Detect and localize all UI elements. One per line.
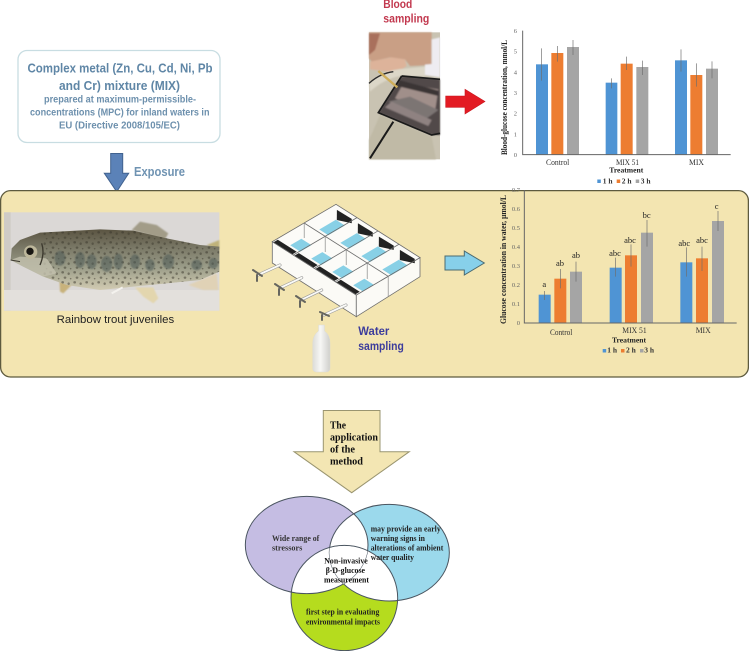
arrow text [330, 420, 378, 468]
y axis tick labels: 4 [514, 69, 518, 76]
legend: 1 h [607, 346, 618, 355]
text: non-invasive measurement [324, 555, 369, 584]
x axis labels [550, 326, 711, 337]
y axis tick labels: 0.6 [512, 206, 521, 213]
arrow: red arrow to blood chart [446, 89, 485, 114]
x axis labels: MIX [689, 158, 704, 167]
text: non-invasive measurement: Non-invasive [324, 555, 368, 565]
significance letters: abc [624, 235, 636, 245]
x axis labels: MIX 51 [616, 158, 639, 167]
y axis tick labels [512, 187, 521, 327]
text: MPC description: EU (Directive 2008/105/EC) [59, 120, 180, 131]
heading: complex metal mixture: Complex metal (Zn, Cu, Cd, Ni, Pb [28, 62, 213, 76]
panel: experimental setting [1, 191, 748, 377]
significance letters: abc [609, 248, 621, 258]
x axis labels: Control [546, 158, 570, 167]
arrow text: of the [330, 445, 355, 456]
text: wide range of stressors [272, 533, 320, 553]
photo: blood sampling from fish [369, 32, 440, 159]
significance letters: bc [643, 210, 651, 220]
arrow: blue arrow to water chart [445, 251, 484, 275]
text: wide range of stressors: Wide range of [272, 533, 320, 543]
venn diagram [245, 496, 449, 651]
y axis tick labels: 3 [514, 90, 517, 97]
y axis tick labels: 0.2 [512, 282, 520, 289]
legend: 1 h [603, 176, 613, 185]
text: MPC description: prepared at maximum-permissible- [44, 95, 196, 106]
significance letters: ab [556, 258, 564, 268]
arrow text: method [330, 457, 363, 468]
y axis title: Glucose concentration in water, µmol/L [499, 195, 508, 324]
arrow text: The [330, 420, 346, 431]
label: water sampling [358, 326, 404, 353]
venn circles [245, 496, 449, 651]
bottle [313, 325, 330, 372]
y axis tick labels: 5 [514, 49, 517, 56]
text: early warning signs: warning signs in [371, 533, 425, 543]
label: exposure: Exposure [134, 165, 185, 179]
label: water sampling: sampling [358, 341, 404, 353]
text: wide range of stressors: stressors [272, 543, 303, 553]
text: early warning signs: water quality [371, 552, 415, 562]
arrow: the application of the method [294, 410, 409, 493]
significance letters: abc [696, 235, 708, 245]
y axis tick labels: 0 [517, 320, 520, 327]
y axis tick labels: 0.3 [512, 263, 520, 270]
heading: complex metal mixture [28, 62, 213, 93]
y axis tick labels: 0.7 [512, 187, 521, 194]
significance letters: ab [572, 250, 580, 260]
bars and error bars [523, 31, 731, 155]
y axis tick labels: 0.5 [512, 225, 520, 232]
text: early warning signs [371, 524, 443, 562]
x axis labels [546, 158, 704, 167]
faucets [253, 265, 346, 320]
text: first step: first step in evaluating [306, 607, 380, 617]
x axis title: Treatment [612, 335, 647, 344]
bars and error bars [524, 190, 737, 323]
text: first step: environmental impacts [306, 616, 381, 626]
x axis labels: MIX 51 [622, 326, 647, 335]
y axis tick labels: 0.1 [512, 301, 520, 308]
text: first step [306, 607, 381, 626]
legend: 3 h [641, 176, 651, 185]
tank top and water [272, 204, 422, 296]
panel: metal mixture text box [18, 50, 220, 142]
text: non-invasive measurement: β-D-glucose [326, 565, 365, 575]
text: non-invasive measurement: measurement [324, 574, 369, 584]
x axis labels: Control [550, 328, 573, 337]
heading: complex metal mixture: and Cr) mixture (MIX) [59, 79, 180, 93]
illustration: tank system with faucets [253, 204, 422, 372]
significance letters: a [542, 279, 546, 289]
y axis tick labels: 0 [514, 152, 517, 159]
y axis tick labels: 6 [514, 28, 518, 35]
significance letters: abc [678, 238, 690, 248]
chart: glucose concentration in water [499, 187, 737, 355]
text: MPC description: concentrations (MPC) for inland waters in [30, 108, 210, 119]
y axis title: Blood-glucose concentration, mmol/L [500, 40, 509, 155]
label: rainbow trout juveniles: Rainbow trout juveniles [57, 314, 175, 326]
text: MPC description [30, 95, 210, 131]
significance letters [542, 201, 719, 289]
x axis labels: MIX [696, 326, 711, 335]
tank walls [272, 242, 356, 317]
text: early warning signs: may provide an early [371, 524, 441, 534]
y axis tick labels [514, 28, 518, 159]
legend [597, 176, 651, 185]
arrow: exposure down arrow [104, 154, 129, 192]
y axis tick labels: 1 [514, 131, 517, 138]
significance letters: c [715, 201, 719, 211]
y axis tick labels: 2 [514, 111, 517, 118]
label: blood sampling: sampling [383, 12, 429, 26]
y axis tick labels: 0.4 [512, 244, 521, 251]
label: blood sampling [383, 0, 429, 26]
x axis title: Treatment [609, 166, 644, 175]
legend: 2 h [622, 176, 632, 185]
label: water sampling: Water [358, 326, 390, 338]
legend: 2 h [626, 346, 637, 355]
photo: rainbow trout juvenile [4, 212, 219, 311]
legend: 3 h [644, 346, 655, 355]
text: early warning signs: alterations of ambient [371, 543, 443, 553]
legend [603, 346, 655, 355]
arrow text: application [330, 433, 378, 444]
chart: blood glucose concentration [500, 28, 731, 185]
